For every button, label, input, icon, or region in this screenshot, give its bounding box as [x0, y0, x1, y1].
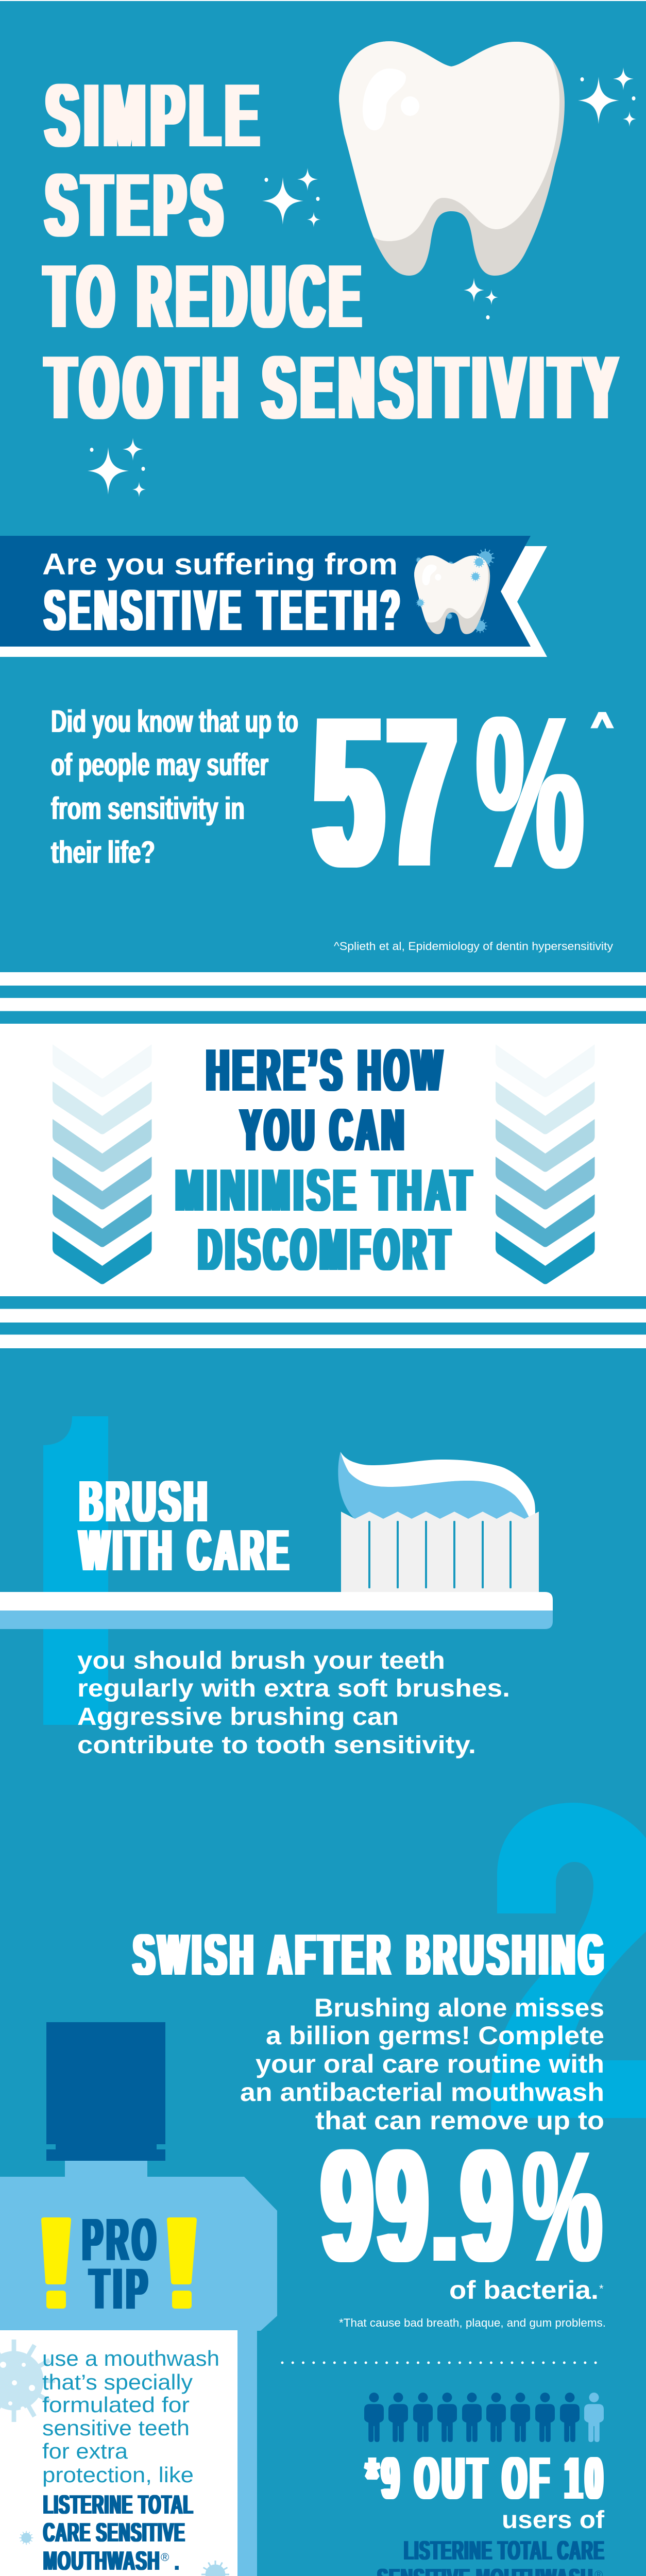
icon: mouthwash bottle: [0, 2022, 277, 2576]
heading: pro tip: TIP: [90, 2257, 151, 2321]
icon: sparkles top right: [578, 67, 636, 127]
text: brushing misses germs: an antibacterial mouthwash: [240, 2078, 604, 2107]
text: brush advice: contribute to tooth sensitivity.: [77, 1732, 476, 1759]
text: pro tip advice: [42, 2346, 219, 2487]
text: product name on label: LISTERINE TOTAL: [43, 2490, 194, 2520]
panel: sensitive teeth banner: [0, 536, 547, 657]
heading: brush with care: WITH CARE: [80, 1518, 292, 1583]
text: brushing misses germs: [240, 1993, 604, 2135]
footnote: bacteria: *That cause bad breath, plaque, and gum problems.: [339, 2316, 606, 2329]
big number 57%: ^: [592, 707, 613, 741]
icon: sparkles under tooth: [464, 278, 498, 319]
stat lead-in text: of people may suffer: [51, 747, 268, 782]
numeral 2: [491, 1803, 646, 2118]
text: brushing misses germs: that can remove up to: [315, 2106, 604, 2135]
text: brush advice: [77, 1647, 510, 1759]
icon: sparkles bottom left: [88, 438, 146, 497]
big number 57%: 57: [315, 672, 462, 911]
text: users of: users of: [502, 2506, 605, 2534]
title: STEPS: [46, 155, 228, 255]
panel: step 2 swish after brushing: [0, 1803, 646, 2576]
heading: pro tip: PRO: [82, 2206, 160, 2273]
banner question: Are you suffering from: [42, 548, 398, 581]
text: brush advice: you should brush your teeth: [77, 1647, 445, 1674]
text: product name: [377, 2536, 605, 2576]
text: brushing misses germs: Brushing alone misses: [314, 1993, 604, 2022]
banner question: [42, 548, 404, 642]
banner ribbon: [0, 536, 547, 657]
chart: 9 of 10 people: [364, 2393, 604, 2442]
text: brush advice: Aggressive brushing can: [77, 1703, 399, 1731]
heading: here's how you can minimise that discomfort: YOU CAN: [241, 1096, 407, 1163]
icon: yellow exclamation marks: [41, 2217, 197, 2309]
text: pro tip advice: that’s specially: [42, 2370, 193, 2394]
text: product name on label: ®: [161, 2551, 169, 2564]
text: pro tip advice: for extra: [42, 2439, 128, 2463]
icon: left chevrons: [53, 1044, 151, 1284]
text: pro tip advice: formulated for: [42, 2393, 190, 2417]
text: pro tip advice: use a mouthwash: [42, 2346, 219, 2370]
text: of bacteria: *: [599, 2282, 604, 2295]
icon: small germs on label: [20, 2531, 229, 2576]
icon: tooth: [330, 31, 565, 276]
stat lead-in text: [51, 704, 298, 870]
title: [45, 65, 623, 437]
icon: large germ on label: [0, 2340, 55, 2422]
stat lead-in text: from sensitivity in: [51, 791, 245, 826]
heading: brush with care: BRUSH: [80, 1469, 211, 1534]
text: pro tip advice: sensitive teeth: [42, 2416, 190, 2440]
icon: toothbrush: [0, 1452, 553, 1629]
text: brushing misses germs: a billion germs! Complete: [266, 2021, 604, 2050]
stat lead-in text: Did you know that up to: [51, 704, 298, 739]
text: brushing misses germs: your oral care routine with: [256, 2049, 604, 2078]
icon: tooth with germs: [411, 549, 495, 634]
panel: 57 percent stat: [51, 672, 613, 953]
heading: brush with care: [80, 1469, 292, 1583]
text: of bacteria: of bacteria.: [449, 2276, 599, 2304]
stat lead-in text: their life?: [51, 835, 155, 870]
text: product name on label: MOUTHWASH: [43, 2546, 160, 2576]
panel: step 1 brush with care: [0, 1416, 553, 1759]
icon: right chevrons: [496, 1044, 594, 1284]
icon: sparkles middle: [262, 168, 320, 227]
footnote: ^Splieth et al, Epidemiology of dentin hypersensitivity: [334, 940, 613, 953]
heading: pro tip: [82, 2206, 160, 2321]
panel: here's how: [0, 972, 646, 1348]
text: product name on label: .: [173, 2546, 180, 2576]
text: product name on label: CARE SENSITIVE: [43, 2518, 185, 2548]
text: brush advice: regularly with extra soft brushes.: [77, 1675, 510, 1702]
text: product name on label: [43, 2490, 194, 2576]
panel: hero: [45, 31, 636, 497]
text: pro tip advice: protection, like: [42, 2463, 194, 2487]
numeral 1: [43, 1416, 108, 1725]
heading: here's how you can minimise that discomfort: [176, 1037, 475, 1283]
title: SIMPLE: [46, 65, 264, 165]
